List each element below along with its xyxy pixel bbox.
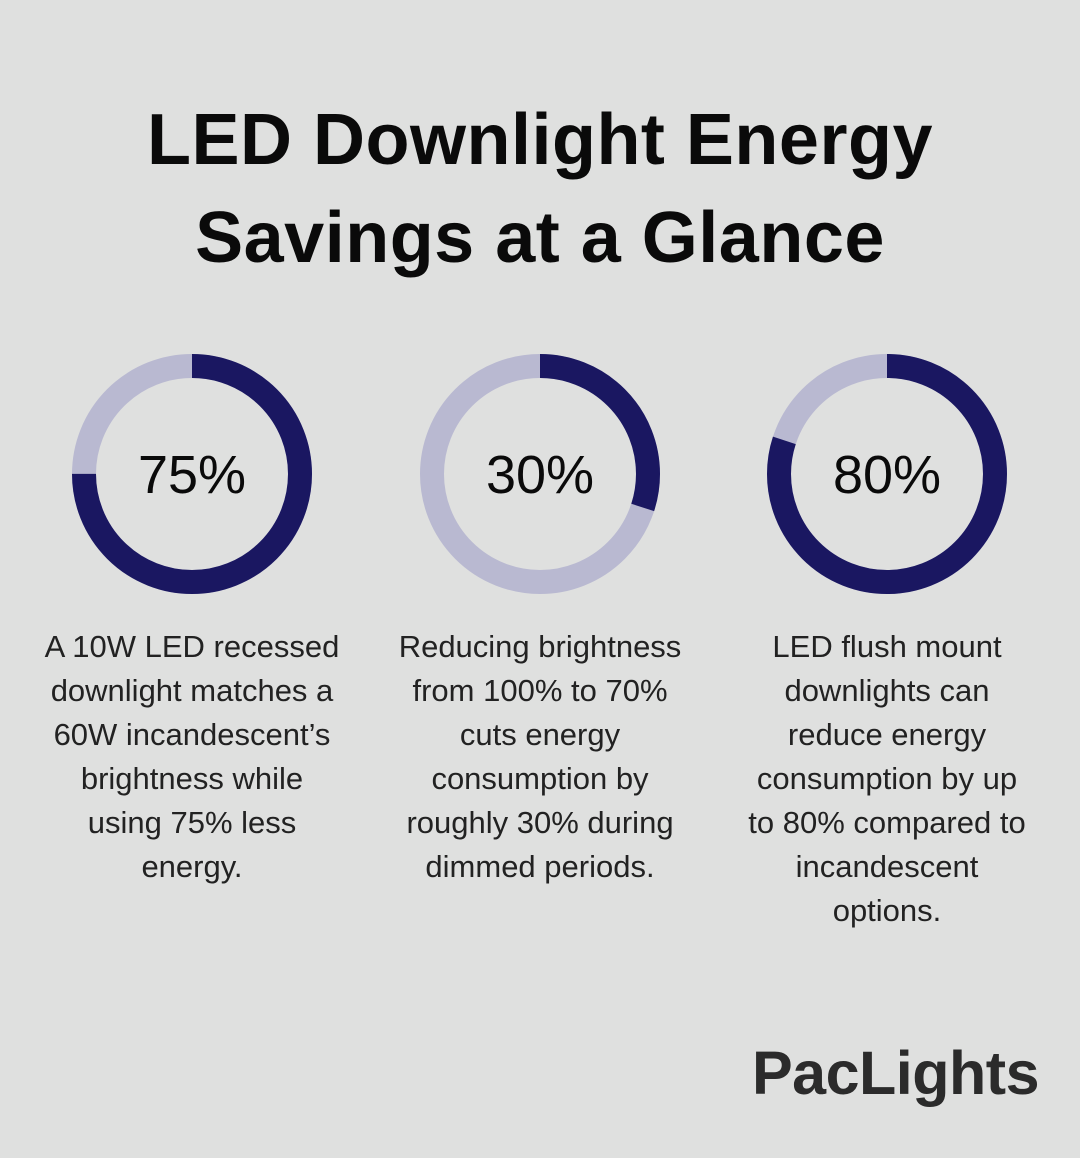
title bbox=[147, 100, 933, 278]
text block: 75% description: downlight matches a bbox=[51, 673, 333, 708]
text block: 75% description: A 10W LED recessed bbox=[45, 629, 339, 664]
title: LED Downlight Energy bbox=[147, 100, 933, 180]
text block: 30% description: consumption by bbox=[431, 761, 649, 796]
text block: 80% description: incandescent bbox=[796, 849, 978, 884]
ring chart: 75%: 75% bbox=[138, 445, 246, 505]
text block: 75% description: using 75% less bbox=[88, 805, 296, 840]
text block: 80% description: to 80% compared to bbox=[748, 805, 1026, 840]
ring chart: 30% bbox=[420, 354, 660, 594]
text block: 30% description: roughly 30% during bbox=[406, 805, 674, 840]
text block: 80% description: LED flush mount bbox=[772, 629, 1002, 664]
ring chart: 80% bbox=[767, 354, 1007, 594]
text block: 30% description: Reducing brightness bbox=[399, 629, 681, 664]
text block: 75% description bbox=[44, 629, 339, 884]
text block: 80% description: downlights can bbox=[784, 673, 990, 708]
text block: 75% description: 60W incandescent’s bbox=[54, 717, 330, 752]
title: Savings at a Glance bbox=[195, 198, 885, 278]
text block: 30% description: from 100% to 70% bbox=[412, 673, 668, 708]
logo: PacLights bbox=[752, 1039, 1039, 1107]
ring chart: 30%: 30% bbox=[486, 445, 594, 505]
text block: 75% description: brightness while bbox=[81, 761, 303, 796]
text block: 80% description: options. bbox=[833, 893, 941, 928]
text block: 30% description: cuts energy bbox=[460, 717, 620, 752]
text block: 80% description: reduce energy bbox=[788, 717, 986, 752]
text block: 30% description bbox=[399, 629, 681, 884]
text block: 80% description bbox=[748, 629, 1026, 928]
ring chart: 80%: 80% bbox=[833, 445, 941, 505]
ring chart: 75% bbox=[72, 354, 312, 594]
text block: 80% description: consumption by up bbox=[757, 761, 1017, 796]
text block: 75% description: energy. bbox=[141, 849, 243, 884]
text block: 30% description: dimmed periods. bbox=[425, 849, 655, 884]
